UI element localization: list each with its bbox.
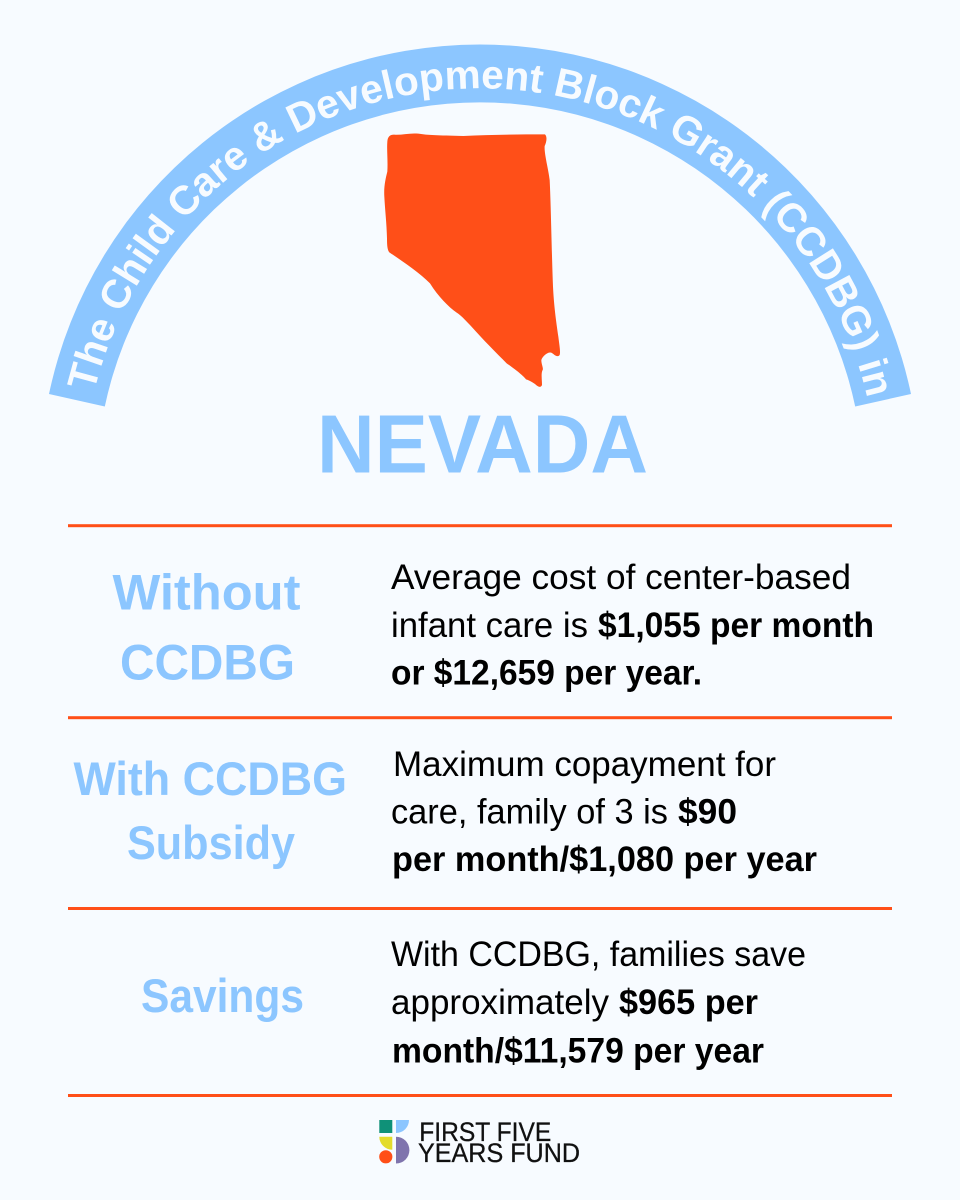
title text on arc: The Child Care & Development Block Grant (CCDBG) in	[67, 66, 888, 396]
logo wordmark	[418, 1117, 580, 1168]
row label: With CCDBG	[74, 752, 347, 805]
logo wordmark: FIRST FIVE	[419, 1117, 551, 1147]
row description: With CCDBG, families save	[391, 935, 806, 974]
row label: CCDBG	[120, 634, 295, 690]
row: savings	[141, 935, 806, 1070]
row label: Savings	[141, 969, 304, 1022]
row description: month/$11,579 per year	[392, 1032, 764, 1070]
row description: Average cost of center-based	[391, 558, 851, 597]
row description: $90	[678, 793, 737, 832]
row description: approximately	[391, 983, 609, 1022]
row description: or $12,659 per year.	[391, 654, 702, 692]
row description: Maximum copayment for	[393, 745, 776, 784]
row label: Subsidy	[127, 816, 295, 869]
logo wordmark: YEARS FUND	[418, 1138, 580, 1168]
row label	[74, 752, 347, 869]
row description: $965 per	[619, 983, 758, 1022]
row label	[112, 564, 301, 690]
row description: $1,055 per month	[598, 606, 874, 645]
row description	[391, 935, 806, 1070]
row: with CCDBG subsidy	[74, 745, 817, 879]
row label: Without	[112, 564, 301, 620]
row description: infant care is	[391, 606, 588, 645]
logo: First Five Years Fund	[379, 1117, 580, 1168]
arc banner with title	[49, 44, 911, 406]
row description: care, family of 3 is	[391, 793, 668, 832]
row description: per month/$1,080 per year	[392, 840, 817, 879]
arc band	[49, 44, 911, 407]
icon: Nevada state map	[384, 133, 560, 387]
row description	[391, 745, 817, 879]
row description	[391, 558, 874, 692]
row: without CCDBG	[112, 558, 874, 692]
icon: logo mark	[379, 1120, 409, 1164]
heading: state name: NEVADA	[317, 398, 648, 491]
